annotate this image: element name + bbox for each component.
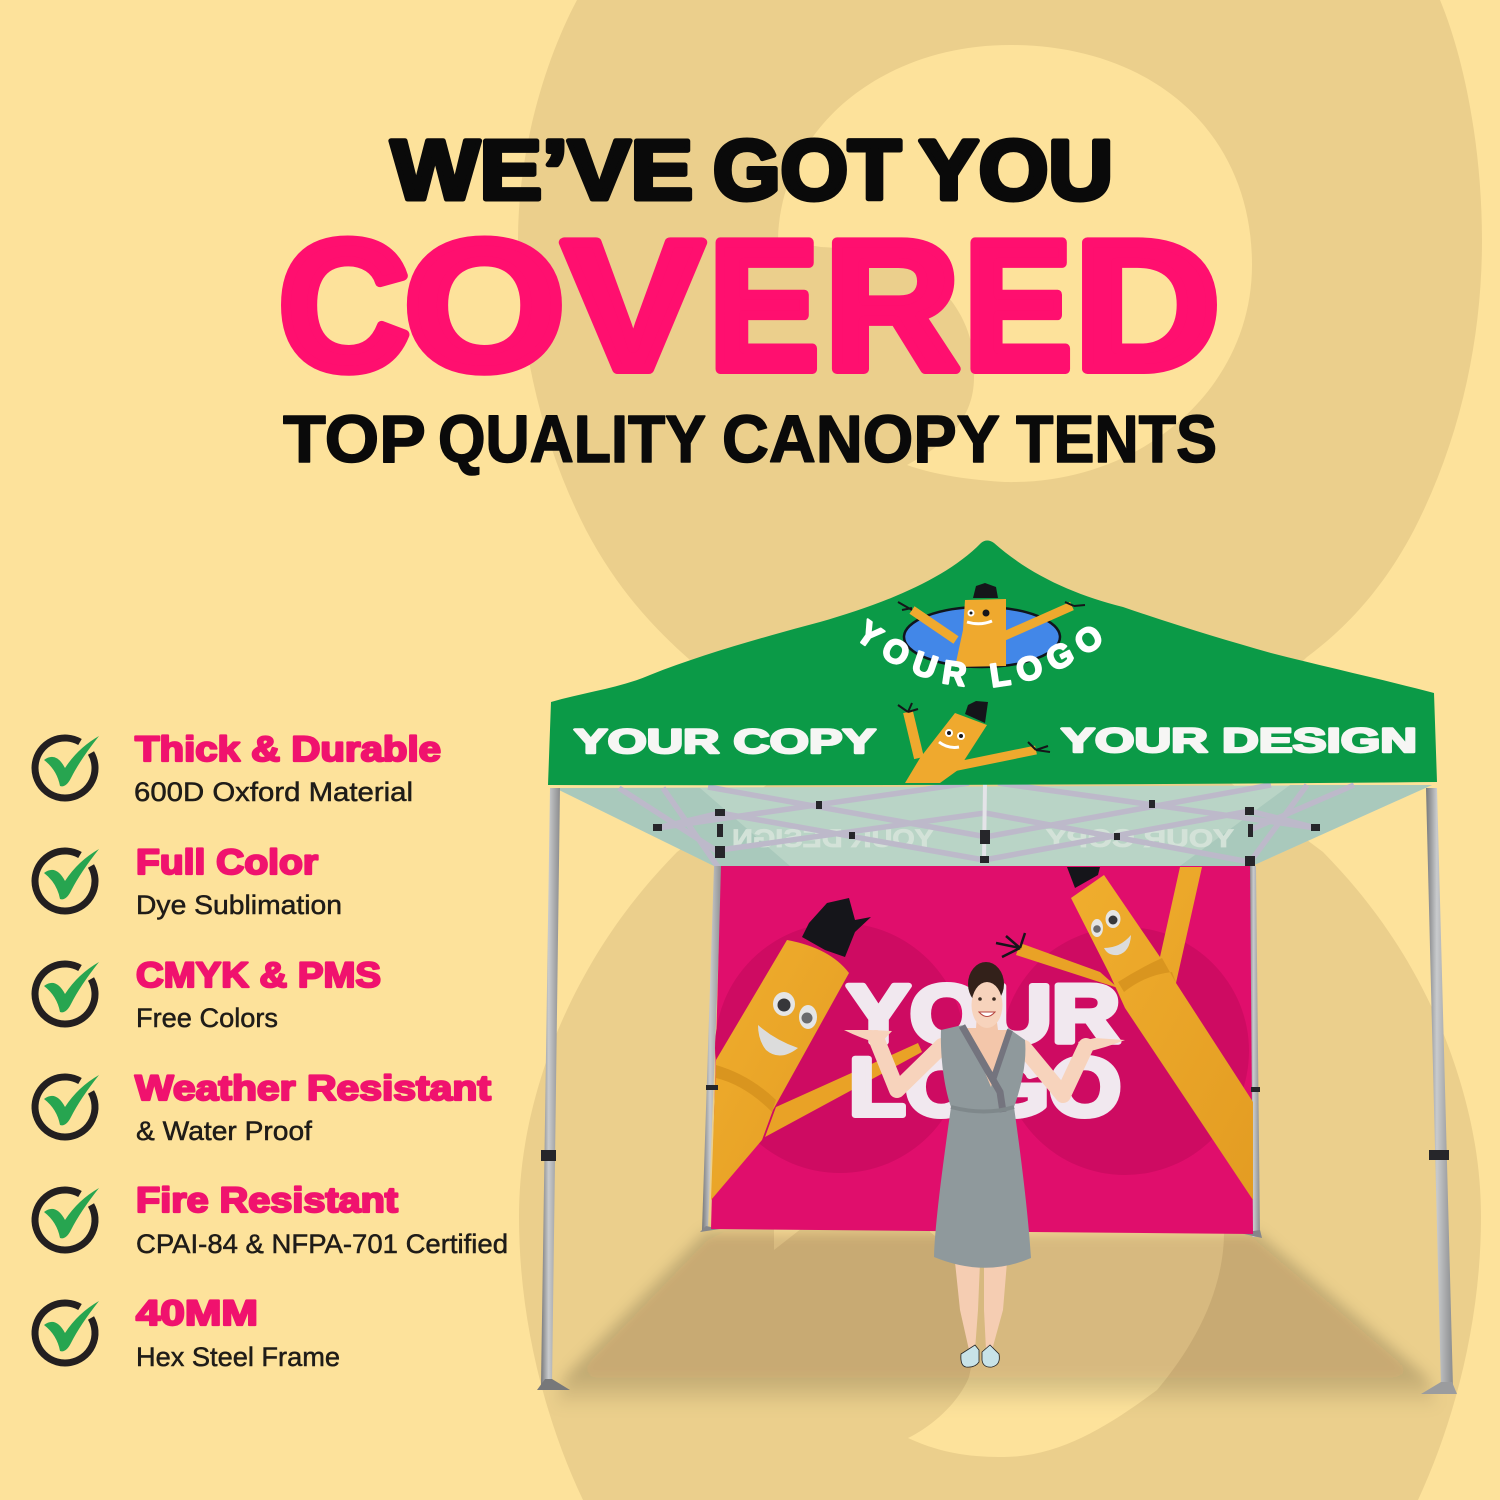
feature: thick and durable: Thick & Durable	[135, 730, 441, 769]
canopy roof	[548, 540, 1437, 786]
feature: thick and durable: 600D Oxford Material	[134, 777, 413, 807]
feature: fire resistant: CPAI-84 & NFPA-701 Certified	[136, 1229, 508, 1259]
subtitle: top quality canopy tents: TENTS	[1016, 402, 1217, 477]
neck and chest	[962, 1015, 1010, 1088]
title: we've got you	[391, 123, 1113, 217]
feature: full color: Full Color	[136, 843, 318, 882]
woman	[844, 962, 1125, 1367]
background numeral shape	[518, 0, 1482, 1500]
underside of canopy: YOUR COPY	[1046, 825, 1234, 853]
feature: 40mm: 40MM	[136, 1294, 258, 1333]
banner text: your logo	[847, 969, 1121, 1133]
valance text: your copy: YOUR COPY	[574, 723, 876, 761]
title: covered: V	[563, 202, 703, 408]
subtitle: top quality canopy tents	[283, 402, 1217, 477]
feature: full color	[35, 843, 342, 920]
canopy tent	[537, 540, 1457, 1394]
banner text: your logo: YOUR	[847, 969, 1120, 1060]
subtitle: top quality canopy tents: CANOPY	[722, 402, 1000, 477]
arms	[876, 1038, 942, 1090]
subtitle: top quality canopy tents: TOP	[283, 402, 426, 477]
back poles	[700, 866, 1262, 1238]
title: covered: O	[404, 202, 565, 408]
front poles	[537, 788, 1457, 1394]
feature: full color: Dye Sublimation	[136, 890, 342, 920]
feature: cmyk and pms	[35, 956, 381, 1033]
underside of canopy: YOUR DESIGN	[732, 825, 934, 853]
feature: cmyk and pms: CMYK & PMS	[136, 956, 381, 995]
roof logo	[860, 583, 1102, 688]
banner text: your logo: LOGO	[849, 1042, 1121, 1133]
title: covered: C	[278, 202, 410, 408]
title: we've got you: WE’VE	[391, 123, 693, 217]
roof logo: YOUR LOGO	[860, 618, 1102, 688]
valance text: your design: YOUR DESIGN	[1061, 722, 1417, 760]
dress	[934, 1025, 1031, 1268]
feature: weather resistant	[35, 1069, 491, 1146]
title: covered	[278, 202, 1220, 408]
title: we've got you: GOT	[713, 123, 901, 217]
head	[968, 962, 1004, 1006]
feature: weather resistant: Weather Resistant	[135, 1069, 491, 1108]
title: we've got you: YOU	[919, 123, 1113, 217]
feature: thick and durable	[35, 730, 441, 807]
feature: fire resistant: Fire Resistant	[136, 1181, 398, 1220]
feature list	[35, 730, 508, 1372]
feature: 40mm	[35, 1294, 340, 1372]
subtitle: top quality canopy tents: QUALITY	[438, 402, 706, 477]
valance tube man	[898, 701, 1050, 783]
feature: weather resistant: & Water Proof	[136, 1116, 313, 1146]
legs	[955, 1262, 980, 1350]
banner circles	[715, 923, 965, 1173]
back pole clips	[706, 1085, 1260, 1092]
feature: fire resistant	[35, 1181, 508, 1259]
feature: cmyk and pms: Free Colors	[136, 1003, 278, 1033]
title: covered: D	[1074, 202, 1220, 408]
floor shadow	[552, 1232, 1440, 1412]
frame connectors	[653, 800, 1320, 868]
title: covered: E	[709, 202, 819, 408]
frame struts	[619, 783, 1354, 870]
underside of canopy	[555, 785, 1432, 867]
tube man left	[711, 898, 922, 1200]
shoes	[961, 1345, 979, 1367]
feature: 40mm: Hex Steel Frame	[136, 1342, 340, 1372]
title: covered: R	[824, 202, 960, 408]
tube man right	[996, 867, 1253, 1200]
title: covered: E	[964, 202, 1072, 408]
back wall banner	[706, 866, 1260, 1234]
